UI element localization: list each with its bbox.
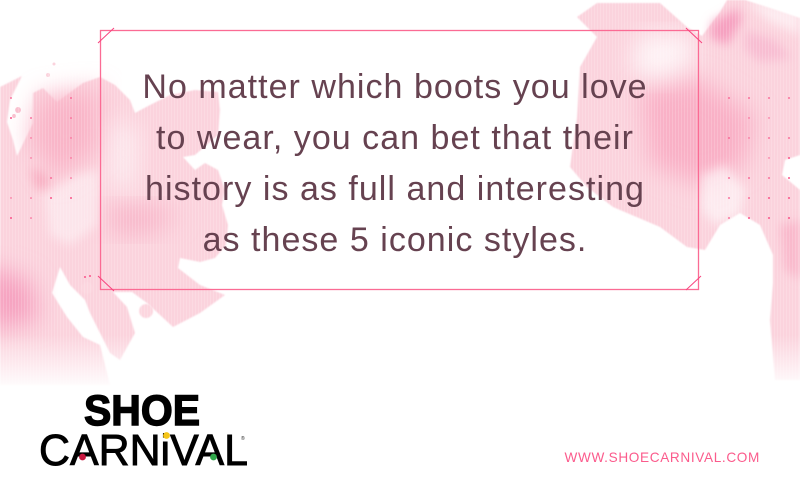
watercolor dot grid: left <box>10 97 91 278</box>
logo: Shoe Carnival: CARNiVAL <box>39 426 248 475</box>
logo: Shoe Carnival: ® <box>241 435 245 442</box>
main message: history is as full and interesting <box>145 170 645 208</box>
bottom fade <box>0 335 800 390</box>
text frame <box>98 28 702 291</box>
watercolor: left wash <box>0 62 400 390</box>
main message: as these 5 iconic styles. <box>203 221 587 259</box>
main message <box>142 68 648 259</box>
watercolor: right wash <box>560 0 800 390</box>
watercolor dot grid: right <box>728 97 790 219</box>
main message: No matter which boots you love <box>142 68 648 106</box>
main message: to wear, you can bet that their <box>156 119 634 157</box>
website url: WWW.SHOECARNIVAL.COM <box>564 450 760 465</box>
logo: Shoe Carnival: SHOE <box>84 387 200 435</box>
